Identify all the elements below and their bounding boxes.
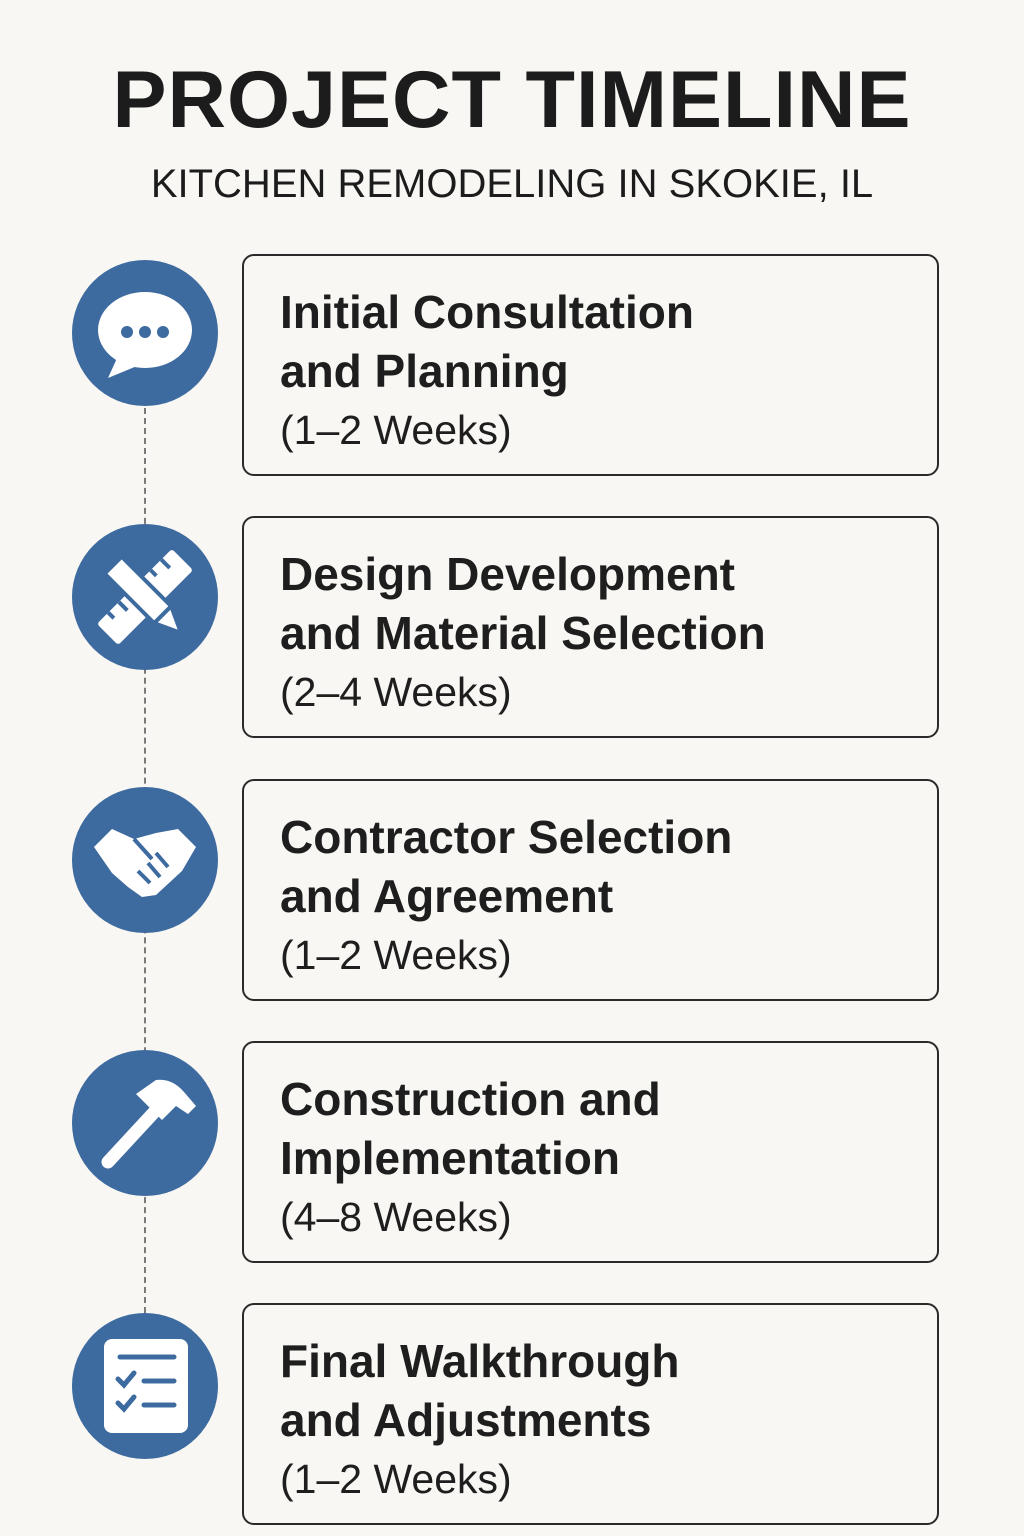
panel: step 1: (1–2 Weeks): [280, 407, 512, 453]
panel: step 5: Final Walkthrough: [280, 1335, 680, 1387]
panel: step 5: and Adjustments: [280, 1394, 651, 1446]
icon: checklist: [72, 1313, 218, 1459]
panel: step 4: Construction and: [280, 1073, 661, 1125]
panel: step 5: [242, 1303, 939, 1525]
panel: step 4: Implementation: [280, 1132, 620, 1184]
panel: step 2: (2–4 Weeks): [280, 669, 512, 715]
panel: step 3: Contractor Selection: [280, 811, 732, 863]
panel: step 2: [242, 516, 939, 738]
connector line: [144, 408, 146, 1313]
subtitle: KITCHEN REMODELING IN SKOKIE, IL: [151, 162, 873, 206]
panel: step 2: and Material Selection: [280, 607, 766, 659]
title: PROJECT TIMELINE: [112, 55, 912, 145]
panel: step 1: Initial Consultation: [280, 286, 694, 338]
panel: step 5: (1–2 Weeks): [280, 1456, 512, 1502]
panel: step 1: [242, 254, 939, 476]
panel: step 2: Design Development: [280, 548, 735, 600]
icon: hammer: [72, 1050, 218, 1196]
icon: chat bubble: [72, 260, 218, 406]
panel: step 4: (4–8 Weeks): [280, 1194, 512, 1240]
panel: step 3: and Agreement: [280, 870, 613, 922]
icon: handshake: [72, 787, 218, 933]
panel: step 3: [242, 779, 939, 1001]
panel: step 3: (1–2 Weeks): [280, 932, 512, 978]
panel: step 4: [242, 1041, 939, 1263]
panel: step 1: and Planning: [280, 345, 569, 397]
icon: pencil and ruler: [72, 524, 218, 670]
